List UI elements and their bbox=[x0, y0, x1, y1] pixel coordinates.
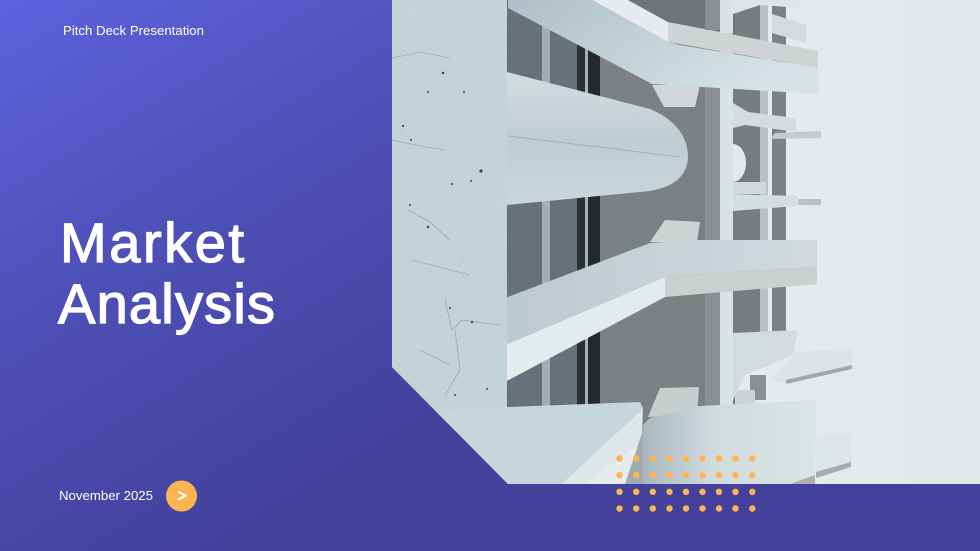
subtitle: Pitch Deck Presentation: Pitch Deck Presentation bbox=[63, 23, 204, 38]
upper right shelves bbox=[733, 0, 786, 14]
vertical pillar bbox=[705, 30, 720, 406]
pipe bbox=[507, 72, 688, 205]
middle beam bbox=[505, 240, 817, 345]
top beam bbox=[508, 0, 819, 94]
dot grid decoration bbox=[616, 455, 756, 512]
bottom left beam bbox=[430, 402, 643, 490]
mid shelves bbox=[733, 103, 797, 132]
title: Market Analysis: Market bbox=[60, 211, 244, 274]
concrete column bbox=[392, 0, 507, 420]
title: Market Analysis bbox=[58, 211, 275, 335]
wall plates bbox=[652, 85, 700, 107]
bottom right beam bbox=[643, 400, 816, 484]
date: November 2025: November 2025 bbox=[59, 488, 153, 503]
icon: orange arrow button bbox=[166, 480, 197, 512]
lower right shelves bbox=[733, 330, 798, 400]
title: Market Analysis: Analysis bbox=[58, 272, 275, 335]
back tower columns bbox=[735, 5, 760, 333]
photo: concrete building bbox=[392, 0, 980, 490]
bottom band bbox=[508, 484, 980, 551]
